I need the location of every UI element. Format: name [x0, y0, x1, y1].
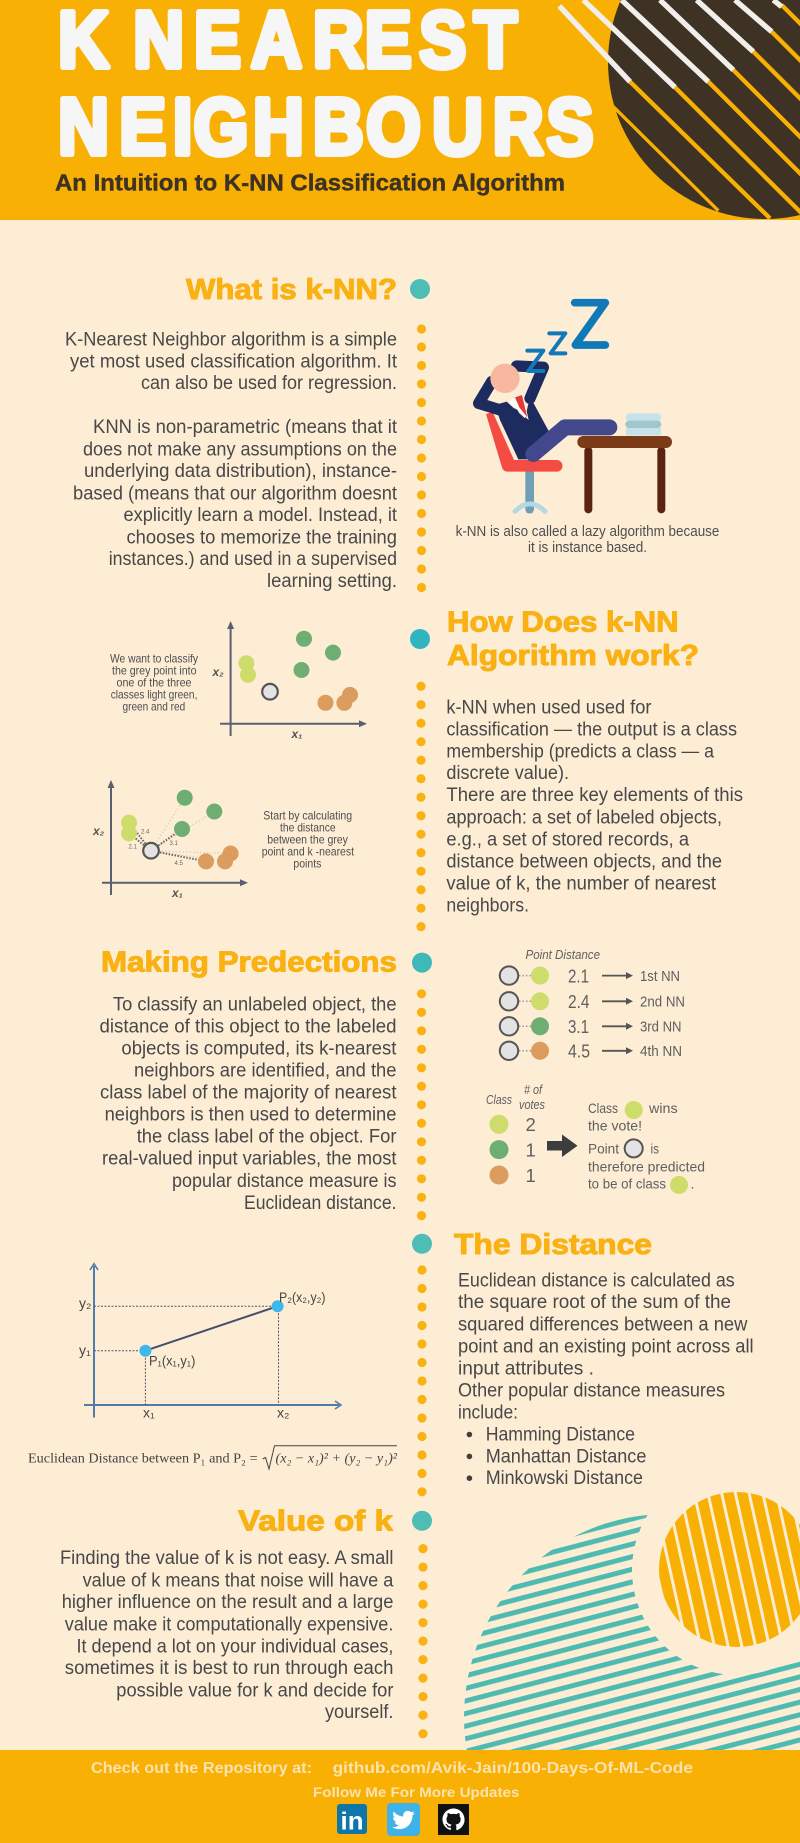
text block: making predictions: class label of the majority of nearest [100, 1083, 397, 1104]
subtitle: An Intuition to K-NN Classification Algorithm [55, 170, 565, 196]
icon: table [577, 436, 672, 513]
scatter chart: distances: 2.4 [141, 830, 150, 836]
formula: euclidean distance: Euclidean Distance between P₁ and P₂ = [28, 1451, 258, 1466]
icon: linkedin: in [340, 1808, 364, 1836]
text block: euclidean distance: include: [458, 1402, 518, 1423]
table: nearest neighbours ranking [500, 947, 685, 1062]
chart: euclidean distance diagram [79, 1264, 341, 1420]
caption: classify grey point [110, 652, 198, 714]
text block: vote result: therefore predicted [588, 1158, 705, 1174]
footer: follow me: Follow Me For More Updates [313, 1784, 520, 1800]
caption: lazy algorithm: k-NN is also called a lazy algorithm because [456, 524, 719, 540]
text block: value of k: possible value for k and decide for [116, 1680, 394, 1701]
icon: zzz [527, 303, 605, 371]
text block: how k-NN works: e.g., a set of stored records, a [446, 830, 689, 851]
text block: what is k-NN: KNN is non-parametric (means that it [93, 417, 398, 438]
caption: classify grey point: We want to classify [110, 652, 198, 666]
scatter chart: distances: x₂ [92, 824, 105, 838]
text block: what is k-NN: does not make any assumptions on the [83, 439, 397, 460]
caption: classify grey point: classes light green, [111, 688, 197, 702]
text block: value of k: Finding the value of k is not easy. A small [60, 1548, 393, 1569]
text block: value of k: sometimes it is best to run through each [65, 1658, 393, 1679]
scatter chart: unlabelled point: x₁ [290, 727, 302, 741]
text block: vote result: Class [588, 1100, 618, 1116]
text block: vote result: . [690, 1175, 694, 1191]
text block: how k-NN works: distance between objects, and the [446, 852, 722, 873]
text block: value of k: higher influence on the result and a large [62, 1592, 393, 1613]
table: nearest neighbours ranking: 4th NN [640, 1043, 682, 1060]
icon: man [479, 364, 609, 459]
footer: repository link: Check out the Repository at: [91, 1760, 312, 1777]
scatter chart: distances [92, 780, 248, 900]
text block: euclidean distance: the square root of the sum of the [458, 1292, 731, 1313]
caption: calculate distances [262, 808, 355, 871]
text block: making predictions: To classify an unlabeled object, the [113, 994, 396, 1015]
caption: calculate distances: between the grey [267, 833, 348, 847]
table: nearest neighbours ranking: 2.4 [568, 991, 590, 1012]
text block: how k-NN works: discrete value). [446, 763, 569, 784]
text block: how k-NN works: value of k, the number of nearest [446, 873, 717, 894]
caption: lazy algorithm [456, 524, 719, 556]
list: distance measures: Minkowski Distance [486, 1468, 643, 1489]
text block: how k-NN works [446, 698, 743, 917]
chart: euclidean distance diagram: P₁(x₁,y₁) [149, 1352, 195, 1368]
list: distance measures [467, 1424, 646, 1489]
icon: twitter [387, 1803, 420, 1836]
text block: what is k-NN: can also be used for regression. [141, 373, 397, 394]
footer: repository link: github.com/Avik-Jain/100-Days-Of-ML-Code [333, 1760, 693, 1777]
chart: euclidean distance diagram: y₁ [79, 1342, 91, 1358]
scatter chart: distances: 2.1 [128, 844, 138, 850]
text block: making predictions: Euclidean distance. [244, 1193, 396, 1214]
icon: github [438, 1804, 469, 1835]
table: nearest neighbours ranking: 4.5 [568, 1040, 590, 1062]
text block: making predictions: popular distance measure is [172, 1171, 396, 1192]
chart: euclidean distance diagram: y₂ [79, 1295, 91, 1311]
text block: value of k: yourself. [325, 1702, 393, 1723]
text block: making predictions: distance of this object to the labeled [100, 1017, 396, 1038]
decorative striped gold circle [659, 1492, 800, 1647]
table: nearest neighbours ranking: 2nd NN [640, 994, 685, 1010]
title [58, 0, 593, 171]
table: nearest neighbours ranking: 3rd NN [640, 1018, 682, 1036]
text block: what is k-NN: explicitly learn a model. Instead, it [124, 505, 398, 526]
text block: what is k-NN: learning setting. [267, 571, 397, 592]
text block: vote result: is [650, 1141, 659, 1157]
arrow: votes to result [547, 1134, 578, 1157]
text block: what is k-NN: K-Nearest Neighbor algorithm is a simple [65, 330, 397, 351]
footer: repository link [91, 1760, 693, 1777]
text block: value of k: value make it computationally expensive. [65, 1614, 393, 1635]
text block: vote result: Point [588, 1141, 619, 1157]
text block: value of k: It depend a lot on your individual cases, [76, 1636, 393, 1657]
heading: How does k-NN work: How Does k-NN [447, 607, 679, 639]
heading: How does k-NN work: Algorithm work? [447, 640, 699, 672]
chart: euclidean distance diagram: x₂ [277, 1404, 289, 1420]
scatter chart: unlabelled point: x₂ [212, 665, 224, 679]
table: class votes: 1 [525, 1140, 536, 1161]
header banner [0, 0, 800, 220]
footer [0, 1750, 800, 1843]
formula: euclidean distance [28, 1446, 398, 1469]
caption: classify grey point: the grey point into [112, 664, 197, 678]
formula: euclidean distance: (x₂ − x₁)² + (y₂ − y₁)² [276, 1451, 398, 1466]
table: nearest neighbours ranking: 1st NN [640, 968, 680, 985]
text block: how k-NN works: k-NN when used used for [446, 698, 652, 718]
caption: classify grey point: one of the three [116, 676, 192, 690]
text block: euclidean distance: Euclidean distance is calculated as [458, 1270, 735, 1291]
decorative striped teal circle [464, 1514, 800, 1750]
table: nearest neighbours ranking: 3.1 [568, 1016, 589, 1037]
caption: classify grey point: green and red [122, 700, 185, 714]
heading: What is k-NN?: What is k-NN? [186, 274, 397, 306]
text block: making predictions: neighbors are identified, and the [134, 1060, 396, 1082]
table: class votes [486, 1082, 545, 1186]
table: class votes: 1 [525, 1165, 536, 1186]
text block: euclidean distance: squared differences between a new [458, 1314, 748, 1335]
table: nearest neighbours ranking: 2.1 [568, 965, 589, 986]
chart: euclidean distance diagram: x₁ [143, 1404, 155, 1420]
caption: calculate distances: point and k -nearest [262, 844, 355, 858]
text block: what is k-NN [65, 330, 398, 592]
text block: euclidean distance: input attributes . [458, 1358, 594, 1380]
table: class votes: 2 [525, 1114, 536, 1135]
scatter chart: distances: x₁ [171, 886, 183, 900]
text block: how k-NN works: neighbors. [446, 896, 529, 917]
decorative striped circle [559, 0, 800, 219]
chart: euclidean distance diagram: P₂(x₂,y₂) [279, 1289, 326, 1305]
text block: value of k: value of k means that noise will have a [83, 1570, 394, 1591]
scatter chart: distances: 3.1 [170, 841, 179, 847]
table: class votes: # of [524, 1082, 543, 1097]
heading: Value of k: Value of k [238, 1506, 394, 1538]
illustration: sleeping businessman [479, 303, 672, 513]
text block: how k-NN works: membership (predicts a class — a [446, 741, 714, 762]
text block: making predictions: the class label of the object. For [137, 1126, 397, 1148]
text block: how k-NN works: There are three key elements of this [446, 785, 743, 806]
heading: The Distance: The Distance [454, 1229, 652, 1261]
text block: making predictions: neighbors is then used to determine [105, 1105, 396, 1126]
list: distance measures: Hamming Distance [486, 1424, 635, 1446]
text block: vote result: wins [648, 1100, 678, 1116]
text block: value of k [60, 1548, 394, 1723]
caption: calculate distances: Start by calculating [263, 808, 352, 822]
table: nearest neighbours ranking: Point Distance [526, 947, 600, 962]
text block: making predictions: real-valued input variables, the most [102, 1149, 397, 1170]
caption: lazy algorithm: it is instance based. [528, 540, 647, 556]
text block: what is k-NN: yet most used classification algorithm. It [70, 351, 398, 372]
text block: what is k-NN: underlying data distribution), instance- [84, 461, 397, 482]
heading: How does k-NN work [447, 607, 699, 672]
text block: making predictions [100, 994, 397, 1214]
text block: what is k-NN: based (means that our algorithm doesnt [73, 483, 398, 504]
table: class votes: votes [519, 1097, 545, 1112]
icon: chair [486, 412, 562, 513]
text block: vote result: the vote! [588, 1118, 642, 1134]
text block: euclidean distance: Other popular distance measures [458, 1380, 725, 1401]
caption: calculate distances: points [293, 857, 321, 871]
text block: vote result [588, 1100, 705, 1194]
text block: vote result: to be of class [588, 1175, 666, 1191]
title: NEIGHBOURS [58, 82, 593, 171]
text block: how k-NN works: classification — the output is a class [446, 720, 737, 741]
icon: linkedin [337, 1804, 367, 1836]
caption: calculate distances: the distance [280, 821, 336, 835]
text block: euclidean distance [458, 1270, 754, 1489]
list: distance measures: Manhattan Distance [486, 1446, 646, 1467]
scatter chart: distances: 4.5 [174, 861, 184, 867]
timeline: dots and section markers [410, 279, 432, 1738]
icon: books [625, 413, 661, 435]
table: class votes: Class [486, 1092, 512, 1107]
text block: making predictions: objects is computed, its k-nearest [121, 1039, 397, 1060]
heading: Making Predections: Making Predections [101, 947, 397, 979]
text block: what is k-NN: instances.) and used in a supervised [109, 549, 397, 570]
text block: euclidean distance: point and an existing point across all [458, 1336, 754, 1357]
text block: how k-NN works: approach: a set of labeled objects, [446, 807, 722, 828]
scatter chart: unlabelled point [212, 621, 367, 741]
text block: what is k-NN: chooses to memorize the training [126, 527, 397, 548]
